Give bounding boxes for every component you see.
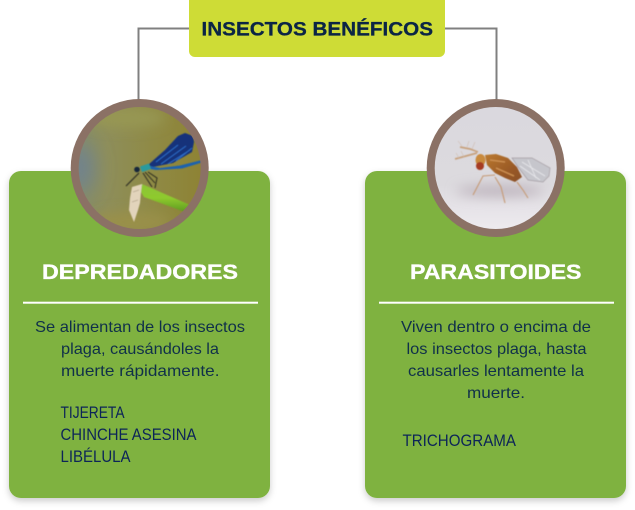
title box — [189, 0, 445, 57]
description text: los insectos plaga, hasta — [406, 341, 587, 358]
panel: parasitoides — [365, 171, 626, 498]
description text: muerte. — [467, 385, 525, 402]
insect list: CHINCHE ASESINA — [60, 426, 196, 444]
description text: causarles lentamente la — [408, 363, 584, 380]
divider — [23, 302, 258, 304]
heading: depredadores: DEPREDADORES — [42, 261, 238, 284]
connector lines — [138, 28, 496, 100]
panel: depredadores — [9, 171, 270, 498]
title: INSECTOS BENÉFICOS — [202, 18, 433, 41]
description text: Viven dentro o encima de — [401, 319, 591, 336]
description text — [401, 319, 591, 402]
insect list — [60, 404, 196, 466]
icon: parasitoid wasp photo — [427, 99, 565, 237]
description text: plaga, causándoles la — [61, 341, 219, 358]
description text — [35, 319, 245, 380]
insect list: LIBÉLULA — [60, 447, 130, 466]
insect list: TRICHOGRAMA — [402, 432, 516, 450]
description text: muerte rápidamente. — [61, 363, 220, 380]
description text: Se alimentan de los insectos — [35, 319, 245, 336]
heading: parasitoides: PARASITOIDES — [410, 261, 582, 284]
insect list: TIJERETA — [60, 404, 124, 422]
icon: dragonfly photo — [66, 99, 209, 237]
divider — [379, 302, 614, 304]
